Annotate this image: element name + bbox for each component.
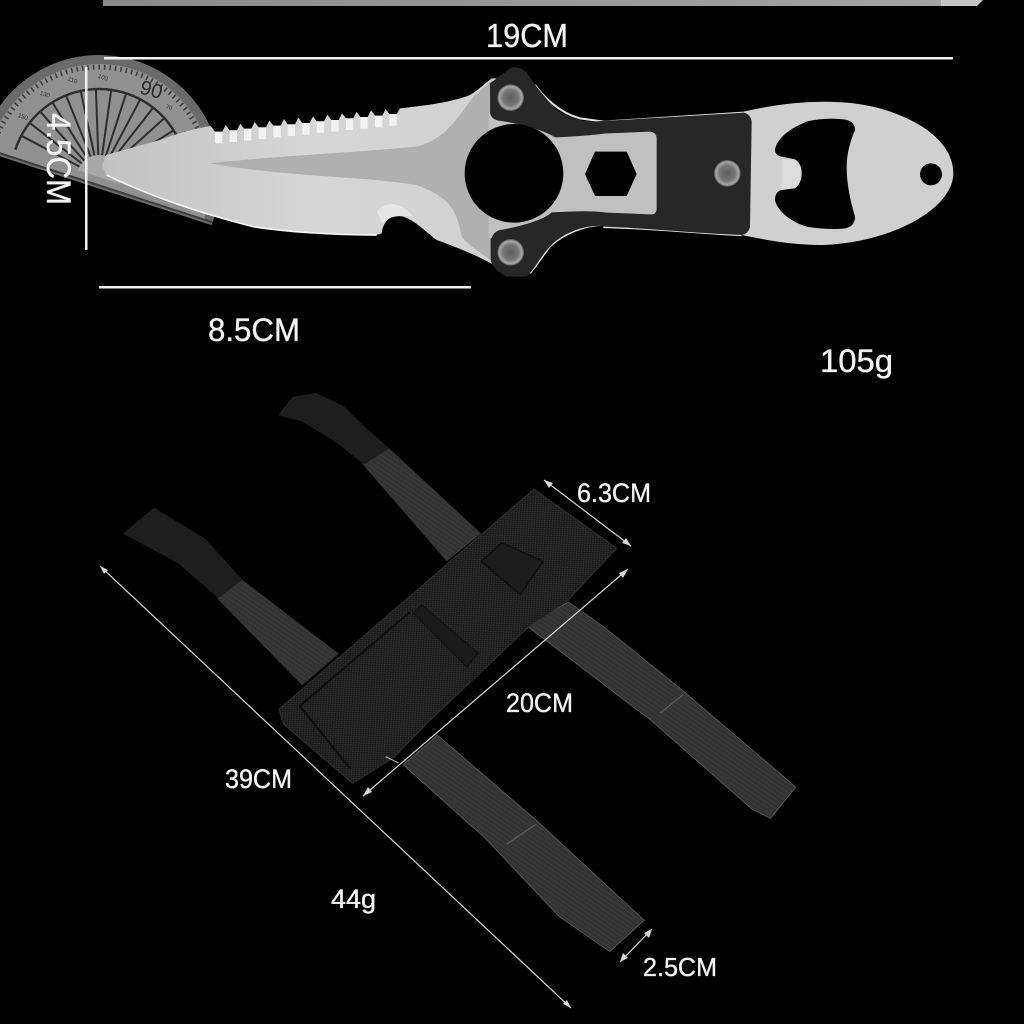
- dimension arrow: 39CM strap length: [100, 566, 571, 1008]
- dimension arrow: 2.5CM strap width: [620, 929, 652, 962]
- serration notches: [215, 114, 397, 143]
- lanyard hole: [920, 163, 942, 185]
- label: knife length 19CM: 19CM: [486, 17, 568, 54]
- label: blade height 4.5CM: 4.5CM: [39, 113, 77, 205]
- label: 2.5CM: 2.5CM: [643, 952, 717, 982]
- dimension arrow: 6.3CM sheath width: [544, 480, 631, 546]
- dimension line: 8.5CM blade length: [99, 286, 471, 288]
- protractor behind the blade: 100: [97, 74, 109, 83]
- metal ruler strip at top: [103, 0, 983, 6]
- label: blade length 8.5CM: 8.5CM: [208, 312, 300, 348]
- pocket stitching: [300, 612, 410, 768]
- label: sheath weight 44g: 44g: [331, 884, 376, 914]
- dimension line: 19CM overall length: [104, 57, 953, 60]
- screws: [497, 84, 741, 266]
- protractor behind the blade: 90: [138, 77, 165, 104]
- finger hole: [465, 124, 563, 223]
- protractor behind the blade: 50: [182, 131, 191, 139]
- sheath flap: [481, 543, 543, 595]
- label: knife weight 105g: 105g: [820, 343, 893, 379]
- knife: [102, 67, 953, 277]
- blade: [102, 78, 520, 273]
- upper strap: [278, 393, 796, 818]
- dimension arrow: 20CM sheath length: [363, 569, 628, 796]
- label: 6.3CM: 6.3CM: [577, 478, 651, 508]
- sheath with straps: [123, 393, 796, 952]
- protractor behind the blade: [0, 23, 253, 225]
- seam nick: [386, 757, 398, 763]
- hex wrench hole: [585, 152, 637, 196]
- protractor behind the blade: 130: [39, 91, 51, 100]
- lower strap: [123, 508, 644, 952]
- label: 20CM: 20CM: [506, 688, 573, 718]
- bottle opener cutout: [775, 119, 855, 229]
- protractor behind the blade: 70: [165, 104, 173, 112]
- sheath pouch: [279, 489, 617, 783]
- protractor behind the blade: 150: [17, 113, 29, 122]
- handle: [465, 67, 953, 277]
- dimension line: 4.5CM blade height: [85, 67, 88, 250]
- protractor behind the blade: 110: [67, 77, 78, 86]
- label: 39CM: 39CM: [225, 764, 292, 794]
- pocket band: [413, 605, 478, 667]
